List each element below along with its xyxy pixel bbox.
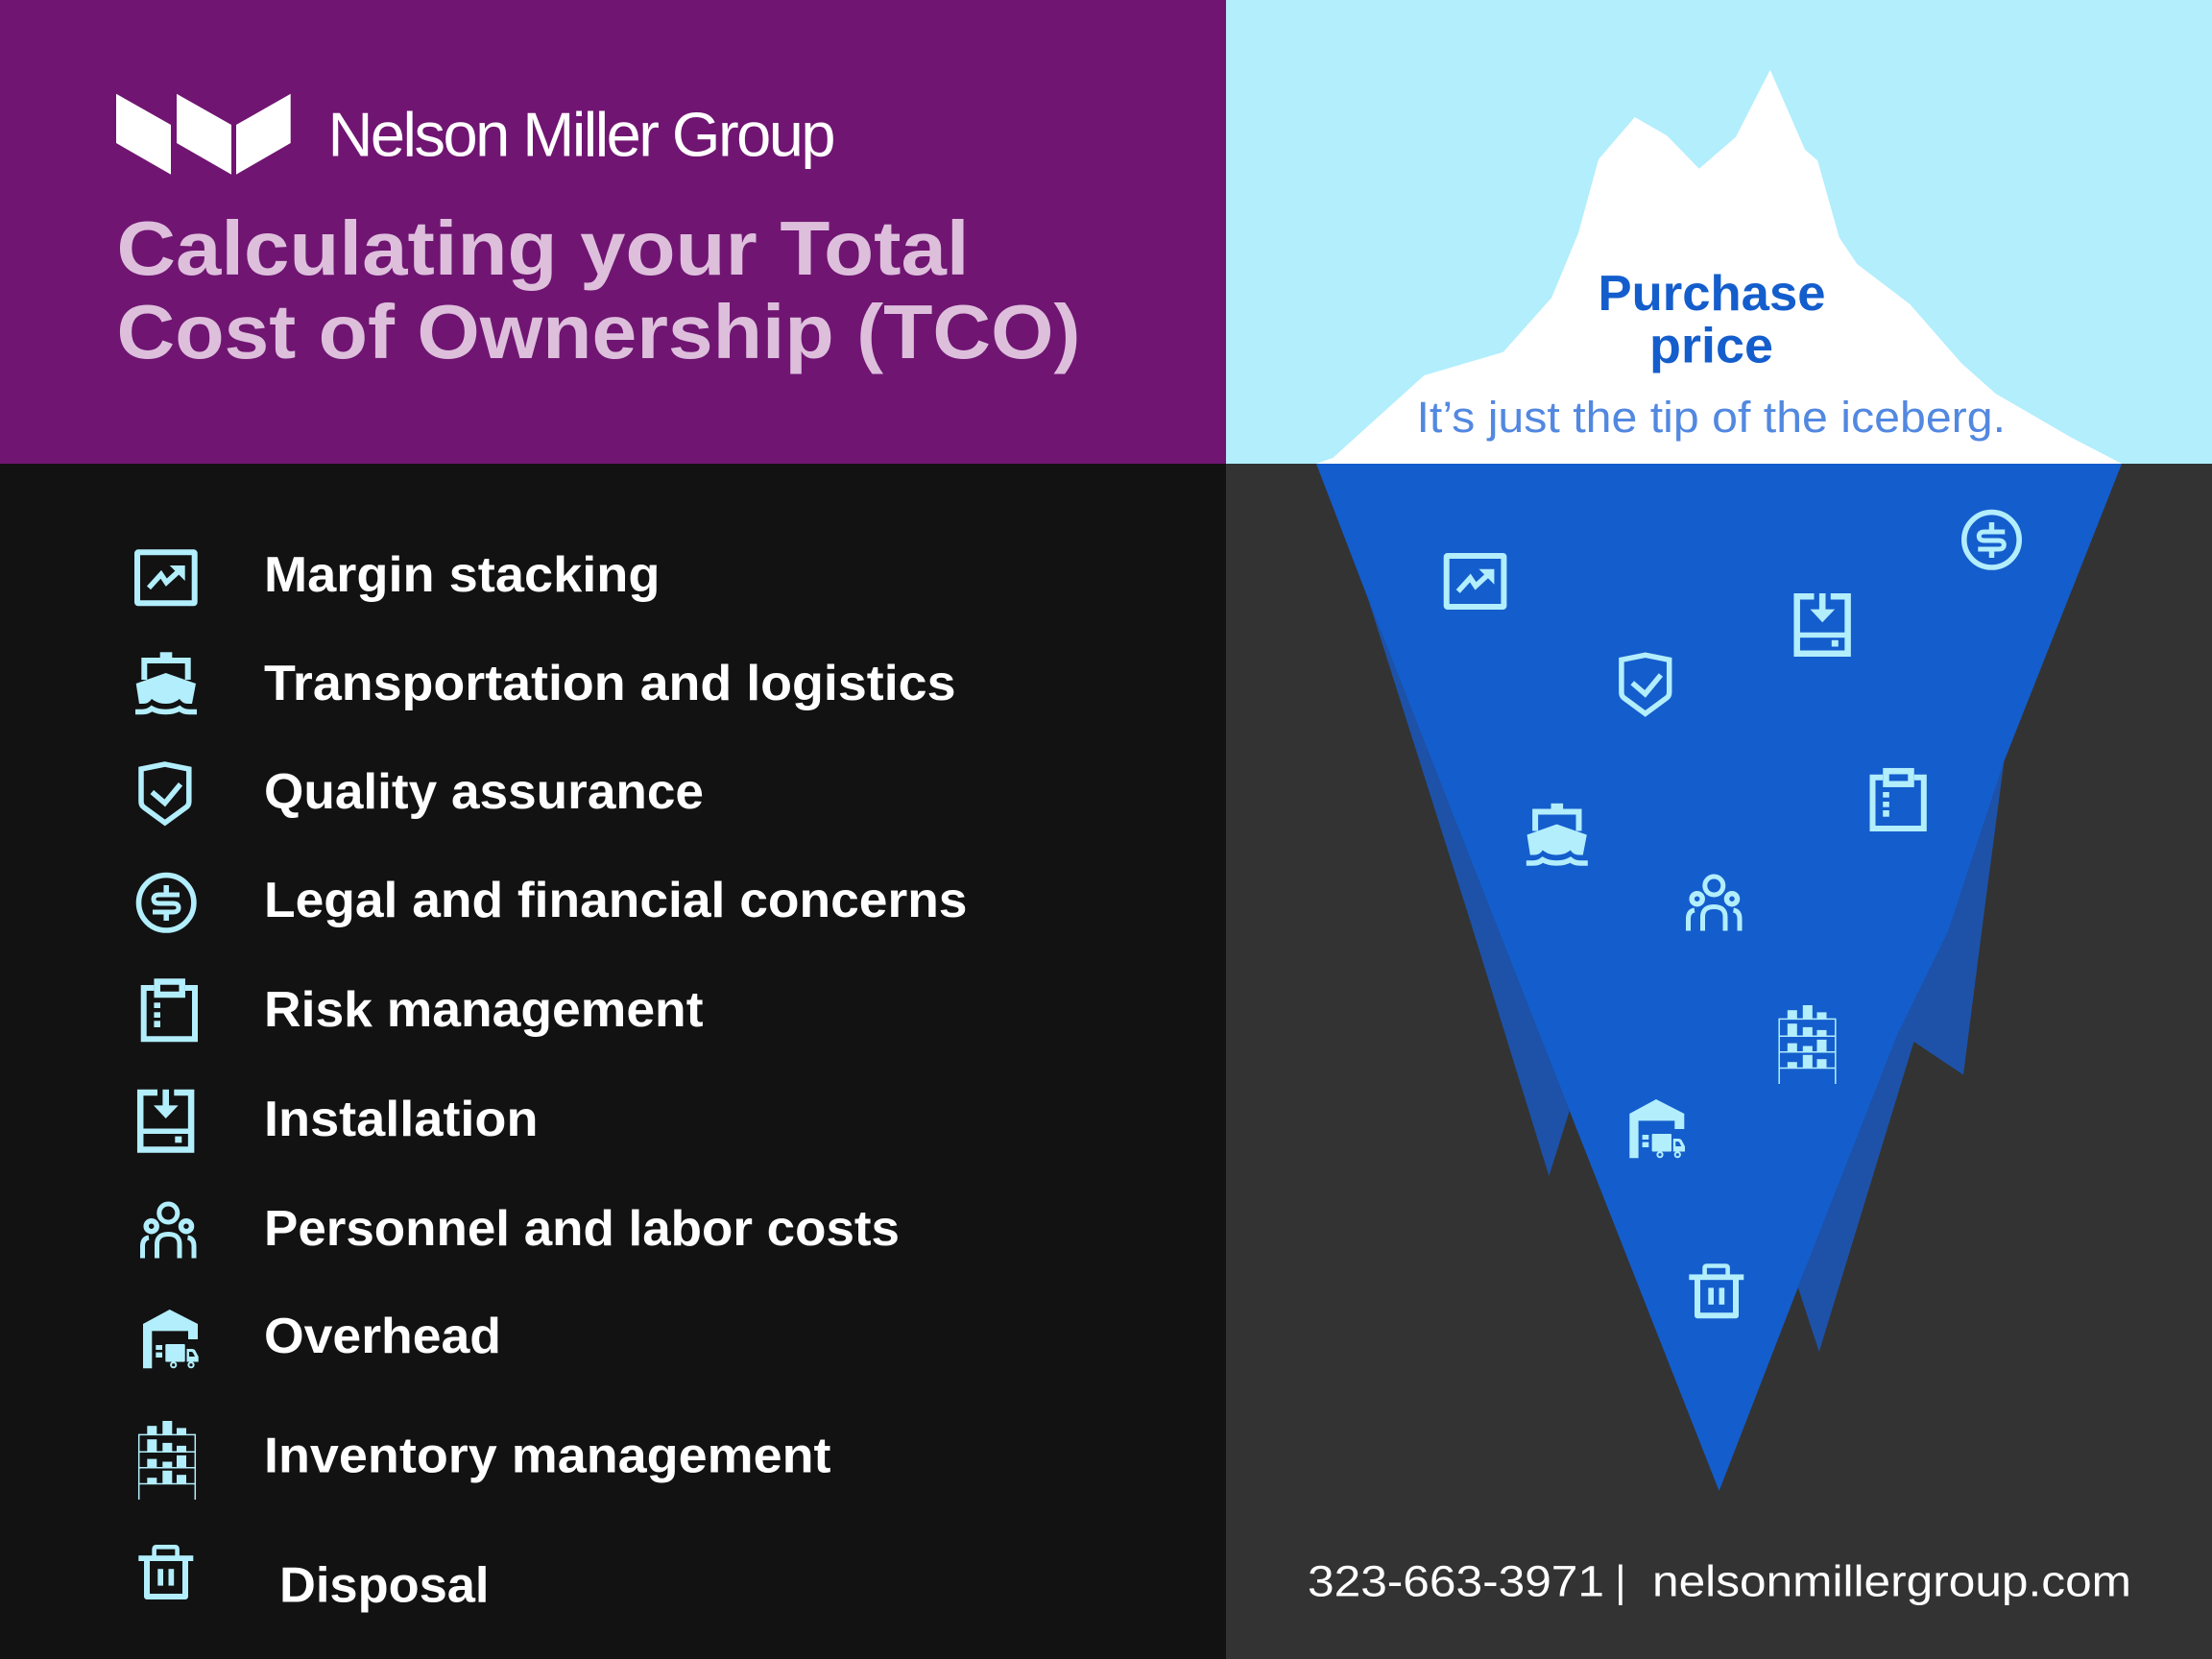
list item: Disposal: Disposal: [279, 1557, 490, 1613]
icon: install: [1793, 593, 1851, 654]
icon: shield: [1622, 655, 1670, 713]
icon: clipboard: [1872, 771, 1924, 829]
panel: cost list: [0, 464, 1226, 1659]
icon: warehouse: [1629, 1099, 1685, 1158]
heading: purchase price: Purchase: [1598, 266, 1826, 322]
main mass: [1316, 464, 2122, 1491]
list item: Installation: [137, 1090, 538, 1150]
shard: left shadow: [1368, 598, 1570, 1176]
icon: dollar: [1964, 513, 2019, 567]
contact footer: 323-663-3971: [1308, 1557, 1604, 1606]
list item: Inventory management: [138, 1421, 831, 1500]
list item: Risk management: Risk management: [264, 982, 703, 1038]
heading: purchase price: [1598, 266, 1826, 374]
title: [117, 205, 1081, 374]
contact footer: nelsonmillergroup.com: [1652, 1557, 2131, 1606]
list item: Personnel and labor costs: Personnel and labor costs: [264, 1201, 900, 1257]
icon: ship: [1527, 804, 1588, 863]
list item: Legal and financial concerns: Legal and financial concerns: [264, 873, 968, 928]
subheading: It’s just the tip of the iceberg.: [1417, 393, 2006, 442]
heading: purchase price: price: [1649, 319, 1773, 374]
iceberg below water: [1316, 464, 2122, 1491]
panel: sky: [1226, 0, 2212, 464]
icon: shelves: [1778, 1005, 1836, 1084]
contact footer: [1308, 1557, 2131, 1606]
shard: right shadow: [1798, 761, 2004, 1352]
icon: chart: [1447, 556, 1503, 607]
list item: Installation: Installation: [264, 1092, 538, 1147]
panel: dark water: [1226, 464, 2212, 1659]
list item: Transportation and logistics: Transportation and logistics: [264, 656, 955, 711]
list item: Quality assurance: Quality assurance: [264, 764, 704, 820]
icon: people: [1688, 877, 1740, 931]
logo wordmark: Nelson Miller Group: [328, 100, 835, 170]
list item: Inventory management: Inventory management: [264, 1429, 831, 1484]
contact footer: |: [1615, 1557, 1626, 1606]
list item: Disposal: [138, 1547, 490, 1613]
list item: Margin stacking: Margin stacking: [264, 547, 661, 603]
list item: Overhead: [143, 1309, 501, 1368]
list item: Overhead: Overhead: [264, 1309, 501, 1364]
title: Cost of Ownership (TCO): [117, 289, 1081, 374]
logo mark: [116, 94, 291, 175]
icon: trash: [1689, 1265, 1743, 1315]
title: Calculating your Total: [117, 205, 970, 291]
panel: purple header: [0, 0, 1226, 464]
iceberg above water: [1316, 70, 2122, 464]
